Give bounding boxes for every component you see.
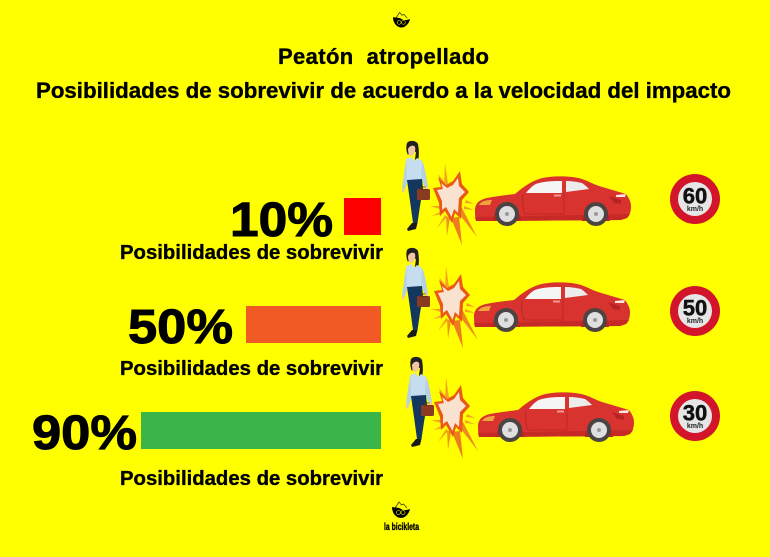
icon: explosion	[431, 377, 478, 459]
icon: red car	[475, 176, 631, 226]
icon: speed sign 30: km/h	[687, 423, 703, 430]
scene: 30 km/h impact	[406, 357, 720, 459]
icon: speed sign 50	[670, 286, 720, 336]
scene: 50 km/h impact	[402, 248, 720, 348]
percentage: 10%: 10%	[230, 194, 333, 247]
panel: 50% row	[120, 301, 383, 380]
icon: pedestrian woman	[402, 141, 430, 231]
icon: speed sign 60: km/h	[687, 206, 703, 213]
icon: explosion	[431, 266, 478, 348]
icon: pedestrian woman	[406, 357, 434, 447]
bottom logo	[384, 502, 419, 533]
icon: speed sign 60	[670, 174, 720, 224]
icon: top logo	[393, 12, 410, 28]
bar: 90% green	[141, 412, 381, 449]
title: Peatón atropellado	[278, 44, 489, 69]
percentage: 50%: 50%	[128, 301, 233, 354]
icon: speed sign 50: km/h	[687, 318, 703, 325]
title	[36, 44, 731, 103]
icon: explosion	[430, 163, 477, 245]
title: Posibilidades de sobrevivir de acuerdo a la velocidad del impacto	[36, 78, 731, 103]
bar: 50% orange	[246, 306, 381, 343]
icon: speed sign 60: 60	[683, 184, 707, 208]
panel: 90% row	[32, 407, 383, 490]
icon: red car	[474, 282, 630, 332]
scene: 60 km/h impact	[402, 141, 720, 245]
icon: bottom logo mark	[392, 502, 410, 518]
percentage: 90%: 90%	[32, 407, 137, 460]
bar: 10% red	[344, 198, 381, 235]
caption: 50%: Posibilidades de sobrevivir	[120, 358, 383, 380]
panel: 10% row	[120, 194, 383, 264]
icon: red car	[478, 392, 634, 442]
caption: 10%: Posibilidades de sobrevivir	[120, 242, 383, 264]
icon: pedestrian woman	[402, 248, 430, 338]
icon: speed sign 50: 50	[683, 296, 707, 320]
logo wordmark: la bicikleta	[384, 521, 419, 533]
caption: 90%: Posibilidades de sobrevivir	[120, 468, 383, 490]
icon: speed sign 30: 30	[683, 400, 707, 426]
icon: speed sign 30	[670, 391, 720, 441]
